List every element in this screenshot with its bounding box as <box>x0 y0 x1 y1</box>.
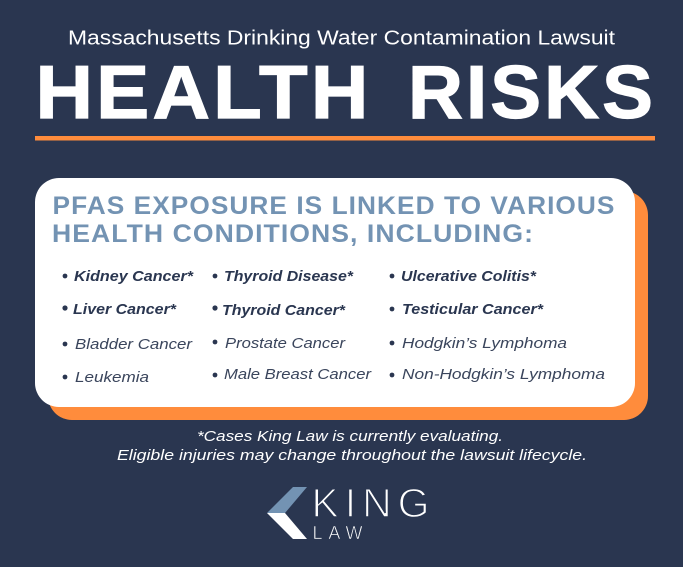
list column 2 <box>212 268 372 383</box>
list column 3: Testicular Cancer* <box>402 301 544 318</box>
title <box>36 50 656 134</box>
title: RISKS <box>408 50 656 134</box>
list column 1 <box>62 268 194 386</box>
orange card shadow <box>48 191 648 420</box>
panel: health conditions card <box>35 178 635 407</box>
footnote <box>117 429 587 464</box>
panel heading <box>52 192 616 248</box>
icon: chevron <box>267 487 307 539</box>
list column 3 <box>390 268 605 383</box>
list column 1: Liver Cancer* <box>73 301 177 318</box>
logo: King Law <box>267 480 430 543</box>
footnote: Eligible injuries may change throughout the lawsuit lifecycle. <box>117 448 587 464</box>
list column 2: Thyroid Cancer* <box>222 302 346 319</box>
logo wordmark: KING <box>312 480 430 526</box>
list column 3: Ulcerative Colitis* <box>401 268 537 285</box>
list column 3: Hodgkin’s Lymphoma <box>402 335 567 352</box>
footnote: *Cases King Law is currently evaluating. <box>197 429 503 445</box>
list column 3: Non-Hodgkin’s Lymphoma <box>402 366 605 383</box>
list column 2: Prostate Cancer <box>225 335 346 352</box>
list column 1: Kidney Cancer* <box>74 268 194 285</box>
panel heading: HEALTH CONDITIONS, INCLUDING: <box>52 220 534 248</box>
list column 2: Male Breast Cancer <box>224 366 372 383</box>
subtitle: Massachusetts Drinking Water Contamination Lawsuit <box>68 28 615 50</box>
list column 1: Leukemia <box>75 369 149 386</box>
panel heading: PFAS EXPOSURE IS LINKED TO VARIOUS <box>52 192 616 220</box>
list column 1: Bladder Cancer <box>75 336 193 353</box>
orange title rule <box>35 136 655 140</box>
list column 2: Thyroid Disease* <box>224 268 354 285</box>
logo subtext: LAW <box>312 523 362 543</box>
title: HEALTH <box>36 50 372 134</box>
